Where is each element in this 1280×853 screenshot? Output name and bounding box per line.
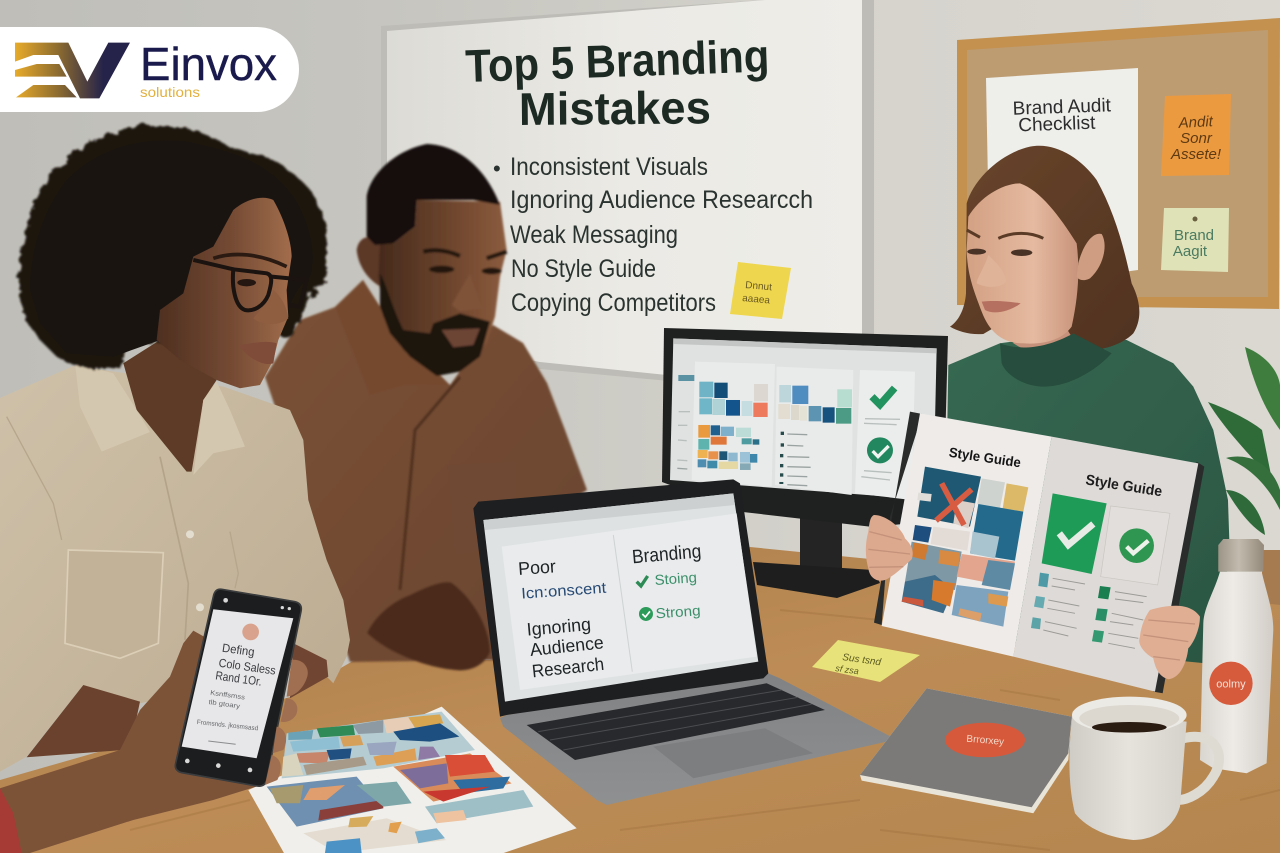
face [357, 144, 507, 376]
left binding [874, 412, 922, 625]
hair [19, 125, 328, 370]
head [19, 125, 328, 475]
mug rim [1072, 697, 1187, 733]
corkboard [957, 18, 1280, 309]
phone heading: Defing [221, 641, 256, 659]
plant [1208, 347, 1280, 620]
monitor screen contents [670, 338, 937, 500]
sticky note on whiteboard [730, 262, 791, 319]
ear [357, 237, 381, 287]
green sticky note: Brand [1174, 227, 1214, 244]
desk grain [130, 610, 1280, 850]
nose highlight [452, 273, 482, 312]
buttons [186, 530, 204, 611]
eye [237, 279, 256, 286]
shirt and arms [0, 366, 350, 772]
person: man in brown shirt [265, 144, 587, 670]
right page [1013, 437, 1198, 692]
notebook [860, 688, 1072, 813]
orange sticky note: Assete! [1170, 146, 1222, 163]
turtleneck [1000, 333, 1112, 387]
monitor frame [662, 328, 948, 527]
logo wordmark: Einvox [140, 38, 277, 90]
brand audit checklist paper [986, 68, 1138, 290]
phone heading [215, 641, 277, 689]
whiteboard title: Top 5 Branding [465, 29, 770, 92]
ignoring audience research text [526, 614, 605, 681]
phone screen [182, 609, 293, 758]
person: woman in green sweater [947, 146, 1230, 663]
notebook: Brrorxey [966, 734, 1004, 748]
nose [253, 290, 288, 324]
left heading: Style Guide [948, 445, 1022, 470]
whiteboard bullet list: Copying Competitors [511, 289, 716, 317]
eyes and brows [967, 249, 1032, 256]
laptop [473, 479, 891, 805]
left page [882, 413, 1052, 657]
lips [982, 301, 1021, 312]
notebook orange logo [945, 723, 1025, 757]
coffee mug [1069, 697, 1219, 840]
desk sticky note: sf zsa [835, 663, 859, 676]
coffee [1092, 722, 1167, 733]
sticky note on whiteboard: Dnnut [745, 280, 773, 293]
desk [0, 547, 1280, 853]
lips [238, 342, 277, 364]
whiteboard title: Mistakes [519, 81, 711, 135]
mug handle [1178, 737, 1219, 800]
green check mark [872, 388, 895, 405]
bottle body [1200, 572, 1273, 773]
phone home line [208, 741, 236, 744]
ignoring audience research text: Audience [529, 632, 605, 660]
right heading: Style Guide [1084, 472, 1163, 500]
neck [123, 340, 217, 472]
swatch list [1031, 573, 1147, 648]
laptop base [500, 673, 891, 805]
phone avatar [242, 624, 259, 640]
fingers over phone [265, 660, 308, 785]
whiteboard bullet list: • [493, 156, 501, 181]
inconsistent text: Icn:onscent [521, 580, 608, 603]
palm and forearm [0, 631, 267, 853]
ear [1077, 234, 1105, 280]
left forearm [27, 685, 140, 757]
monitor [662, 328, 948, 598]
phone heading: Colo Saless [218, 656, 277, 678]
orange sticky note: Sonr [1180, 130, 1213, 147]
whiteboard title [465, 29, 770, 135]
lips [442, 328, 480, 347]
nose shade [977, 255, 1007, 287]
phone small text: Ksnffsmss [210, 690, 246, 702]
do green check panel [1042, 493, 1107, 574]
strong check [639, 603, 701, 622]
phone small text: tlb gtoary [208, 699, 241, 710]
bottle cap [1218, 539, 1264, 572]
photo collage poster [248, 707, 577, 853]
phone small text [196, 690, 259, 732]
ignoring audience research text: Research [531, 654, 605, 681]
strong check: Strong [655, 603, 701, 622]
eyebrow [213, 255, 287, 267]
phone dots [185, 598, 291, 772]
desk sticky note: Sus tsnd [842, 652, 882, 668]
white water bottle: oolmy [1216, 678, 1246, 690]
brand audit checklist paper: Checklist [1018, 113, 1096, 136]
chest pocket [448, 462, 515, 555]
sweater [947, 333, 1230, 663]
keyboard [527, 683, 825, 760]
placket [160, 457, 188, 640]
orange sticky note [1161, 94, 1231, 176]
stoing check [637, 570, 698, 589]
right binding [1153, 462, 1204, 693]
screen divider [613, 535, 632, 672]
brown shirt [265, 280, 587, 662]
logo: Einvox solutions [0, 27, 299, 112]
branding text: Branding [631, 541, 702, 568]
left hand holding book [866, 515, 913, 581]
keyboard rows [538, 690, 812, 750]
laptop screen [483, 493, 758, 702]
collar [75, 363, 245, 475]
glasses [193, 260, 307, 310]
whiteboard bullet list: Inconsistent Visuals [510, 153, 708, 181]
phone [175, 589, 301, 786]
beard [380, 273, 490, 376]
placket and cuff shade [400, 377, 460, 590]
logo pill [0, 27, 299, 112]
right hand holding book [1139, 606, 1200, 679]
hair core [30, 140, 313, 357]
whiteboard bullet list: Weak Messaging [510, 221, 678, 249]
collar [335, 280, 450, 395]
face [157, 198, 292, 388]
bottle label [1209, 662, 1253, 705]
stoing check: Stoing [654, 570, 698, 589]
person: woman with glasses [0, 125, 350, 772]
laptop lid [473, 479, 768, 717]
chest pocket [65, 550, 163, 658]
whiteboard: top 5 branding mistakes [381, 0, 874, 400]
face [967, 183, 1078, 344]
sleeve seam [7, 417, 238, 588]
green check badge [867, 437, 893, 463]
white water bottle [1200, 539, 1273, 773]
mug body [1069, 712, 1187, 840]
beige shirt [0, 366, 350, 772]
do-not collage with red cross [902, 467, 1028, 627]
phone heading: Rand 1Or. [215, 668, 263, 689]
red sleeve [0, 788, 22, 853]
check badge panel [1101, 506, 1170, 585]
orange sticky note: Andit [1177, 113, 1214, 132]
poor text: Poor [517, 555, 557, 579]
eyes and brows [429, 266, 502, 274]
brand audit checklist paper: Brand Audit [1012, 95, 1112, 120]
whiteboard bullet list [493, 153, 813, 317]
desk sticky note [812, 640, 920, 682]
touchpad [653, 728, 813, 778]
monitor stand [753, 515, 880, 598]
ignoring audience research text: Ignoring [526, 614, 592, 640]
man's clasped hands [367, 582, 490, 670]
right forearm [290, 643, 328, 698]
green sticky note [1161, 208, 1229, 272]
phone small text: Fromsnds. jkosmsasd [196, 719, 259, 732]
skin [378, 200, 507, 373]
logo mark [15, 43, 130, 98]
style guide book [866, 412, 1204, 693]
whiteboard bullet list: No Style Guide [511, 255, 656, 283]
sticky note on whiteboard: aaaea [742, 293, 771, 306]
hand holding phone [0, 589, 308, 853]
hair back [950, 146, 1139, 350]
whiteboard bullet list: Ignoring Audience Researcch [510, 186, 813, 214]
neck [1013, 327, 1074, 353]
hair [367, 144, 500, 245]
green sticky note: Aagit [1173, 243, 1208, 260]
logo subtitle: solutions [140, 84, 200, 100]
